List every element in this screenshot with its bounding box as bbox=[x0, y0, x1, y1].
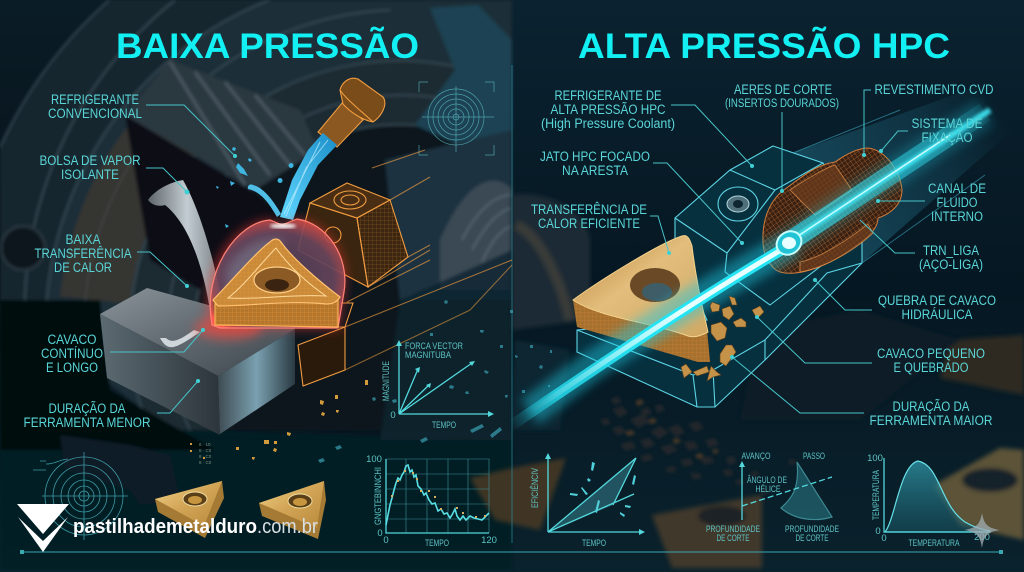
label: bolsa de vapor: ISOLANTE bbox=[61, 167, 119, 182]
chart: temperature curve: 0 bbox=[881, 533, 887, 544]
label: liga: TRN_LIGA bbox=[923, 243, 979, 258]
chart: helix angle: PROFUNDIDADE bbox=[706, 524, 760, 535]
chart: helix angle: PROFUNDIDADE bbox=[785, 524, 839, 535]
HPC jet lower beam bbox=[512, 227, 806, 425]
chart: helix angle: PASSO bbox=[803, 451, 825, 462]
chart: helix angle: DE CORTE bbox=[796, 533, 828, 544]
divider between panels bbox=[511, 65, 513, 543]
nozzle bbox=[318, 78, 385, 147]
vapour bubble bbox=[206, 218, 346, 330]
label: baixa transferência: TRANSFERÊNCIA bbox=[34, 246, 132, 261]
small table of values bbox=[199, 442, 212, 465]
label: quebra de cavaco: HIDRÁULICA bbox=[902, 307, 972, 322]
label: revestimento CVD: REVESTIMENTO CVD bbox=[874, 82, 994, 97]
label: sistema de fixação: FIXAÇÃO bbox=[922, 130, 972, 145]
small table of values: 8 · 10 bbox=[199, 442, 211, 447]
steel workpiece bbox=[100, 288, 295, 435]
label: baixa transferência: DE CALOR bbox=[54, 260, 112, 275]
icon: star watermark bbox=[964, 513, 1000, 548]
chart: temperature curve: TEMPERATURA bbox=[871, 470, 882, 520]
label: cavaco contínuo: CAVACO bbox=[48, 332, 96, 347]
label: canal de fluido: FLUIDO bbox=[936, 195, 978, 210]
label: aeres de corte bbox=[725, 82, 839, 110]
label: cavaco contínuo: CONTÍNUO bbox=[41, 346, 103, 361]
label: transferência eficiente: CALOR EFICIENTE bbox=[538, 216, 640, 231]
wireframe tool holder left bbox=[298, 150, 512, 386]
chart: time series: 0 bbox=[383, 535, 389, 546]
small table of values: 8 · C0 bbox=[199, 448, 212, 453]
label: sistema de fixação bbox=[912, 116, 982, 145]
bottom axis line bbox=[20, 550, 1003, 554]
chart: force vectors: TEMPO bbox=[432, 420, 456, 431]
title: baixa pressão: BAIXA PRESSÃO bbox=[116, 27, 419, 66]
label: jato HPC: JATO HPC FOCADO bbox=[540, 149, 650, 164]
chart: efficiency: TEMPO bbox=[582, 538, 606, 549]
small broken chips bbox=[681, 296, 764, 381]
label: sistema de fixação: SISTEMA DE bbox=[912, 116, 982, 131]
background: lathe chuck bbox=[0, 0, 512, 570]
label: duração maior: FERRAMENTA MAIOR bbox=[870, 413, 993, 428]
label: liga: (AÇO-LIGA) bbox=[919, 257, 983, 272]
wireframe holder right bbox=[577, 110, 985, 407]
label: duração menor: FERRAMENTA MENOR bbox=[24, 415, 151, 430]
label: refrigerante convencional: CONVENCIONAL bbox=[48, 106, 142, 121]
label: transferência eficiente: TRANSFERÊNCIA DE bbox=[531, 202, 647, 217]
label: liga bbox=[919, 243, 983, 272]
chart: time series: GNGTEBINNCHI bbox=[373, 467, 384, 525]
background: blurred inserts on the right bbox=[470, 194, 1024, 568]
label: refrigerante HPC: REFRIGERANTE DE bbox=[554, 88, 662, 103]
label: bolsa de vapor: BOLSA DE VAPOR bbox=[40, 153, 141, 168]
chart: force vectors bbox=[381, 340, 494, 431]
heat glow at contact bbox=[194, 316, 262, 340]
logo bbox=[17, 504, 318, 552]
chart: temperature curve: TEMPERATURA bbox=[908, 538, 960, 549]
label: cavaco pequeno bbox=[877, 346, 985, 375]
chart: helix angle: ÂNGULO DE bbox=[747, 475, 787, 486]
chart: force vectors: FORCA VECTOR bbox=[405, 341, 463, 352]
orange internal coil bbox=[763, 148, 902, 273]
label: canal de fluido: INTERNO bbox=[931, 209, 983, 224]
gold insert right bbox=[573, 235, 710, 362]
chart: force vectors: MAGNITUBA bbox=[405, 350, 452, 361]
small table of values: 8 · C0 bbox=[199, 460, 212, 465]
label: duração maior: DURAÇÃO DA bbox=[892, 399, 970, 414]
label: jato HPC bbox=[540, 149, 650, 178]
debris pile bbox=[600, 396, 797, 495]
label: cavaco pequeno: CAVACO PEQUENO bbox=[877, 346, 985, 361]
chart: time series: 100 bbox=[366, 454, 382, 465]
label: cavaco contínuo: E LONGO bbox=[46, 360, 98, 375]
label: refrigerante HPC: ALTA PRESSÃO HPC bbox=[550, 102, 666, 117]
background: right panel bbox=[512, 0, 1024, 572]
chart: efficiency: EFICIÊNCIV bbox=[530, 468, 541, 508]
background: left panel bbox=[0, 0, 512, 572]
label: baixa transferência: BAIXA bbox=[66, 232, 100, 247]
label: refrigerante HPC bbox=[541, 88, 675, 131]
label: duração menor: DURAÇÃO DA bbox=[48, 401, 126, 416]
label: baixa transferência bbox=[34, 232, 132, 275]
label: refrigerante HPC: (High Pressure Coolant) bbox=[541, 116, 675, 131]
chart: temperature curve: 200 bbox=[974, 532, 990, 543]
label: canal de fluido bbox=[928, 181, 986, 224]
icon: spiral target top bbox=[419, 82, 494, 155]
label: cavaco pequeno: E QUEBRADO bbox=[894, 360, 968, 375]
sparks and gold particles left bbox=[190, 380, 368, 460]
logo: .com.br bbox=[257, 516, 318, 538]
insert icon 2 bbox=[259, 481, 326, 539]
HPC jet upper beam bbox=[792, 110, 990, 240]
label: duração maior bbox=[870, 399, 993, 428]
label: quebra de cavaco bbox=[878, 293, 996, 322]
label: jato HPC: NA ARESTA bbox=[562, 163, 628, 178]
label: cavaco contínuo bbox=[41, 332, 103, 375]
chart: time series bbox=[366, 454, 497, 549]
icon: target bottom bbox=[33, 452, 128, 540]
small table of values: 8 · C0 bbox=[199, 454, 212, 459]
chart: helix angle: AVANÇO bbox=[742, 451, 770, 462]
leader lines with end dots bbox=[110, 90, 925, 413]
label: refrigerante convencional bbox=[48, 92, 142, 121]
chart: efficiency bbox=[530, 453, 645, 549]
chart: temperature curve: 100 bbox=[867, 453, 883, 464]
label: refrigerante convencional: REFRIGERANTE bbox=[51, 92, 139, 107]
gold insert left bbox=[213, 239, 340, 327]
coolant stream bbox=[216, 133, 337, 228]
label: quebra de cavaco: QUEBRA DE CAVACO bbox=[878, 293, 996, 308]
tool shaft right bbox=[793, 78, 1024, 263]
chart: helix angle bbox=[706, 451, 839, 544]
chart: temperature curve bbox=[867, 453, 990, 549]
chart: helix angle: HÉLICE bbox=[756, 484, 780, 495]
label: canal de fluido: CANAL DE bbox=[928, 181, 986, 196]
label: bolsa de vapor bbox=[40, 153, 141, 182]
title: alta pressão HPC: ALTA PRESSÃO HPC bbox=[578, 27, 950, 66]
label: aeres de corte: (INSERTOS DOURADOS) bbox=[725, 98, 839, 110]
teal dust bbox=[318, 300, 552, 463]
label: duração menor bbox=[24, 401, 151, 430]
label: transferência eficiente bbox=[531, 202, 647, 231]
label: aeres de corte: AERES DE CORTE bbox=[734, 82, 832, 97]
long metal chip bbox=[148, 180, 226, 324]
chart: time series: TEMPO bbox=[425, 538, 449, 549]
chart: force vectors: 0 bbox=[390, 410, 396, 421]
logo: pastilhademetalduro bbox=[73, 516, 257, 538]
insert icon 1 bbox=[155, 481, 224, 538]
chart: time series: 0 bbox=[377, 528, 383, 539]
chart: time series: 120 bbox=[481, 535, 497, 546]
chart: temperature curve: 0 bbox=[875, 526, 881, 537]
chart: helix angle: DE CORTE bbox=[716, 533, 750, 544]
chart: force vectors: MAGNITUDE bbox=[381, 361, 392, 401]
